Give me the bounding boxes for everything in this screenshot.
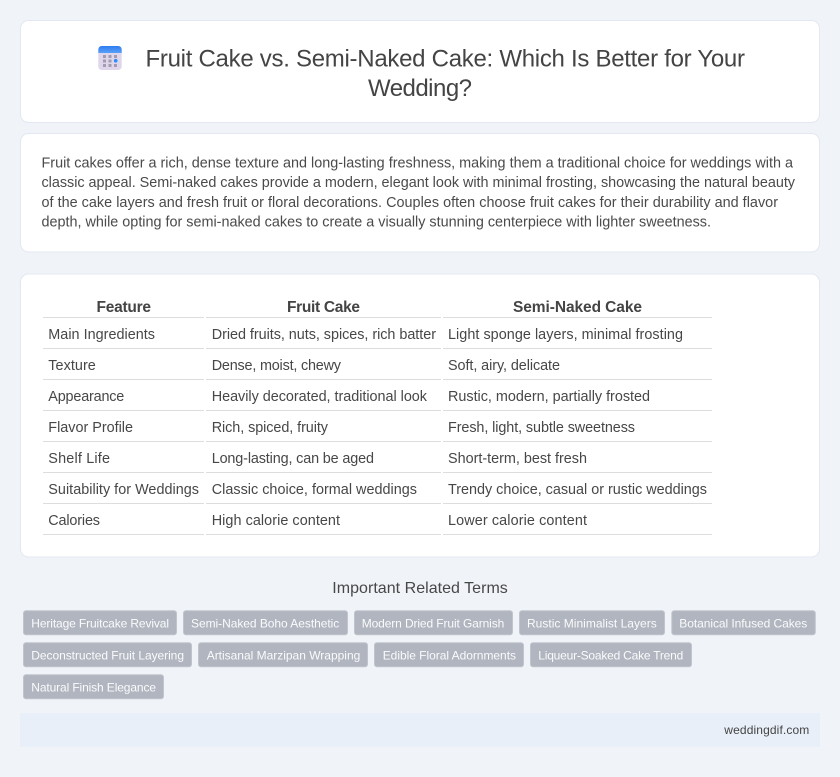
tag: Botanical Infused Cakes [679,616,807,630]
tag: Natural Finish Elegance [31,680,156,694]
title: Wedding? [368,75,472,102]
text block: introduction [42,156,796,230]
tag [24,611,176,635]
text block: introduction: depth, while opting for semi-naked cakes to create a visually stunning centerpiece with lighter sweetness. [42,214,711,230]
tag: Deconstructed Fruit Layering [31,648,184,662]
row: shelf life: Shelf Life [48,451,110,467]
related terms tags [24,611,815,699]
row: calories [48,513,587,529]
row: flavor profile: Flavor Profile [48,420,133,436]
panel: comparison table [20,274,820,557]
heading: important related terms: Important Related Terms [332,580,508,597]
tag [198,643,368,667]
row: texture: Soft, airy, delicate [448,358,560,374]
footer [20,713,820,747]
tag [374,643,524,667]
row: suitability for weddings: Trendy choice, casual or rustic weddings [448,482,707,498]
row: shelf life [48,451,587,467]
panel: title header [20,20,820,122]
footer: weddingdif.com [723,723,809,737]
tag [24,675,164,699]
row: texture: Dense, moist, chewy [212,358,342,374]
row: appearance: Rustic, modern, partially frosted [448,389,650,405]
row: calories: High calorie content [212,513,340,529]
row: flavor profile [48,420,635,436]
title: Fruit Cake vs. Semi-Naked Cake: Which Is Better for Your [146,46,745,73]
row: suitability for weddings: Suitability for Weddings [48,482,199,498]
text block: introduction: Fruit cakes offer a rich, dense texture and long-lasting freshness, making them a traditional choice for weddings with a [42,156,793,172]
row: texture [48,358,560,374]
row: shelf life: Short-term, best fresh [448,451,587,467]
tag [530,643,692,667]
row: appearance: Appearance [48,389,124,405]
tag: Liqueur-Soaked Cake Trend [538,648,683,662]
table header row [96,299,642,316]
row: main ingredients: Light sponge layers, minimal frosting [448,327,683,343]
tag: Artisanal Marzipan Wrapping [207,648,360,662]
icon: calendar [98,46,122,70]
tag: Semi-Naked Boho Aesthetic [191,616,339,630]
tag [672,611,815,635]
row: appearance: Heavily decorated, traditional look [212,389,428,405]
row: suitability for weddings: Classic choice, formal weddings [212,482,417,498]
table header row: Semi-Naked Cake [513,299,642,316]
row: flavor profile: Fresh, light, subtle sweetness [448,420,635,436]
tag [184,611,348,635]
panel: introduction [20,134,820,252]
table header row: Feature [96,299,151,316]
tag: Heritage Fruitcake Revival [31,616,169,630]
title [146,46,745,102]
row: main ingredients: Dried fruits, nuts, spices, rich batter [212,327,436,343]
row: appearance [48,389,650,405]
table header row: Fruit Cake [287,299,360,316]
tag [24,643,192,667]
row: calories: Calories [48,513,100,529]
row: suitability for weddings [48,482,707,498]
text block: introduction: classic appeal. Semi-naked cakes provide a modern, elegant look with minimal frosting, showcasing the natural beauty [42,175,796,191]
tag: Modern Dried Fruit Garnish [362,616,504,630]
text block: introduction: of the cake layers and fresh fruit or floral decorations. Couples often choose fruit cakes for their durability and flavor [42,195,778,211]
row: main ingredients [48,327,683,343]
row: flavor profile: Rich, spiced, fruity [212,420,329,436]
row: calories: Lower calorie content [448,513,587,529]
tag [520,611,664,635]
row: shelf life: Long-lasting, can be aged [212,451,374,467]
row: main ingredients: Main Ingredients [48,327,155,343]
tag: Edible Floral Adornments [383,648,516,662]
row: texture: Texture [48,358,96,374]
tag [354,611,512,635]
tag: Rustic Minimalist Layers [527,616,657,630]
